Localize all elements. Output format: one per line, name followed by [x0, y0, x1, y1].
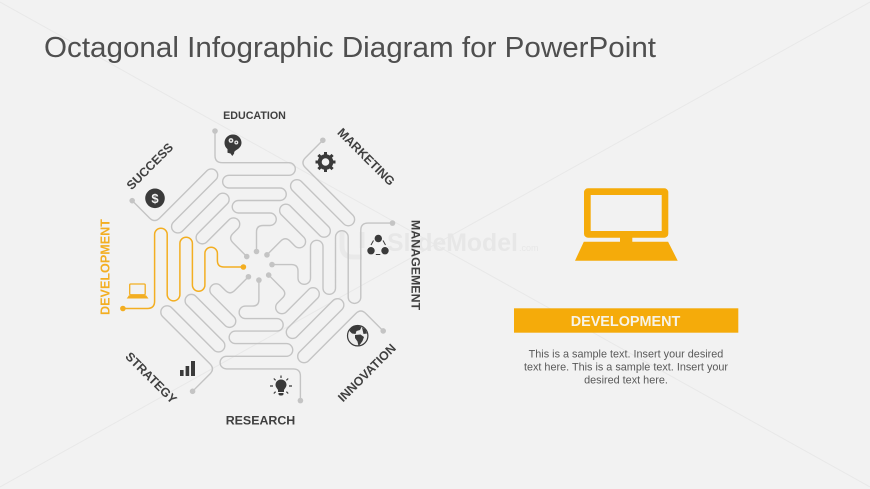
watermark: SlideModel	[387, 230, 518, 257]
icon: large laptop	[575, 188, 678, 261]
icon: globe	[348, 326, 368, 346]
text block: description: desired text here.	[584, 374, 668, 386]
path: marketing	[234, 136, 382, 284]
icon: dollar coin: $	[151, 191, 159, 206]
icon: gear	[316, 152, 336, 172]
label: marketing: MARKETING	[335, 126, 397, 188]
path: research	[220, 277, 303, 403]
panel: development banner: DEVELOPMENT	[571, 314, 680, 330]
text block: description	[524, 348, 728, 386]
icon: three connected circles	[367, 235, 389, 254]
label: research: RESEARCH	[226, 414, 295, 428]
text block: description: This is a sample text. Insert your desired	[529, 348, 723, 360]
path: management	[269, 220, 395, 303]
watermark: .com	[519, 243, 539, 253]
icon: bar chart	[180, 361, 195, 376]
label: development: DEVELOPMENT	[98, 219, 112, 315]
icon: small laptop	[127, 284, 148, 298]
text block: description: text here. This is a sample text. Insert your	[524, 361, 728, 373]
path: success	[128, 142, 276, 290]
label: management: MANAGEMENT	[409, 220, 423, 311]
path: education	[212, 128, 295, 254]
label: innovation: INNOVATION	[335, 341, 399, 405]
icon: light bulb	[270, 376, 292, 396]
watermark	[342, 230, 539, 257]
label: success: SUCCESS	[124, 140, 176, 193]
octagonal diagram	[120, 128, 395, 403]
path: innovation	[239, 242, 387, 390]
title: Octagonal Infographic Diagram for PowerPoint	[44, 32, 656, 64]
panel: development banner	[514, 308, 738, 333]
icon: dollar coin	[145, 188, 165, 208]
label: education: EDUCATION	[223, 110, 286, 122]
label: strategy: STRATEGY	[123, 350, 180, 407]
path: development (highlighted)	[120, 228, 246, 311]
icon: head with gears	[224, 134, 242, 156]
path: strategy	[134, 247, 282, 395]
